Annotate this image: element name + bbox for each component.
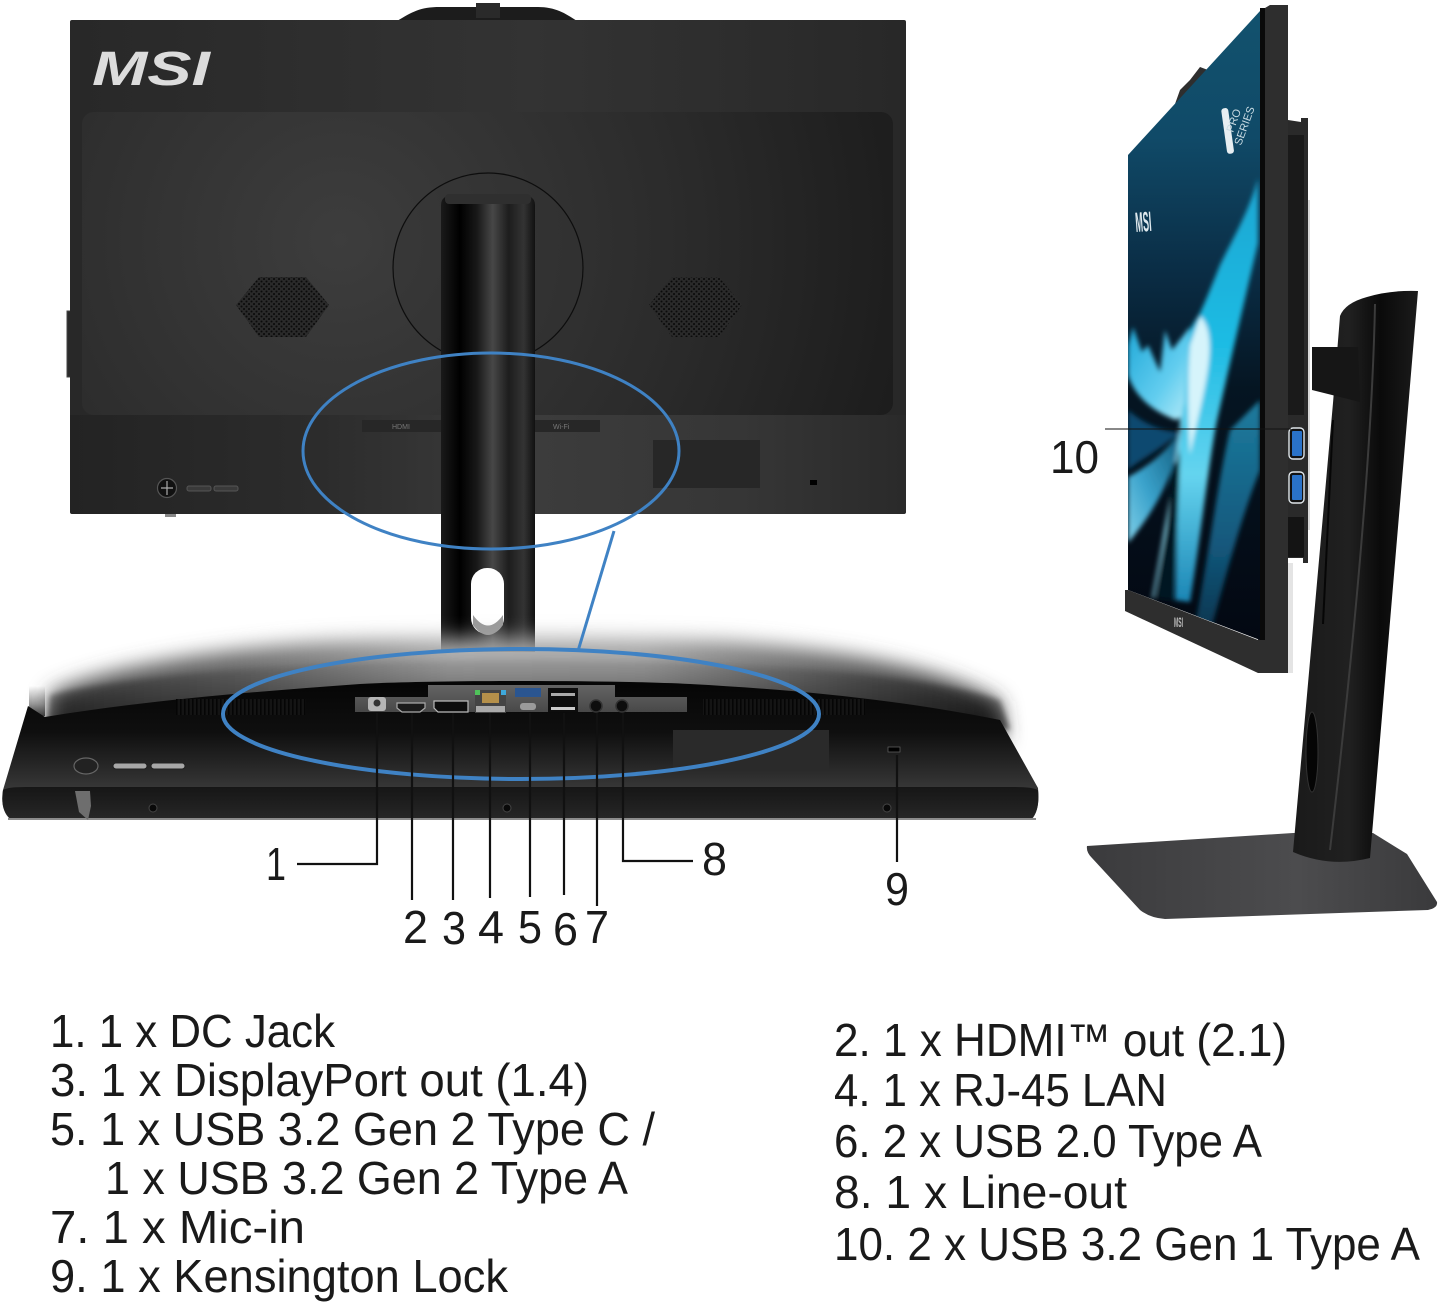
stand top cap (445, 194, 531, 204)
hinge arm (1312, 347, 1360, 402)
screen (1128, 11, 1260, 640)
port list left column: 3. 1 x DisplayPort out (1.4) (50, 1054, 589, 1106)
main band (1175, 178, 1258, 602)
bottom edge highlight (8, 818, 1036, 820)
dark swirl (1128, 410, 1180, 470)
thin strand (1153, 405, 1183, 598)
monitor side view: MSI (1174, 614, 1183, 630)
callout connector (578, 531, 614, 651)
port list left column: 9. 1 x Kensington Lock (50, 1250, 509, 1302)
callout ellipse lower (223, 649, 819, 779)
number labels: 9 (885, 863, 909, 915)
side button panel (67, 311, 82, 377)
rating plate (673, 730, 829, 771)
callout ellipse upper (303, 353, 679, 549)
stand cable slot (1306, 712, 1318, 792)
monitor back housing (70, 20, 906, 514)
number labels (266, 833, 909, 955)
cable hole (471, 568, 504, 635)
number label 10: 10 (1050, 431, 1099, 483)
webcam bump (397, 3, 577, 21)
port 1 DC jack (368, 697, 386, 711)
monitor side view (1050, 5, 1437, 919)
leader line 10 (1105, 428, 1291, 430)
number labels: 4 (478, 901, 504, 953)
MSI logo: MSI (92, 43, 212, 96)
lower housing band (70, 415, 906, 514)
port list left column: 1 x USB 3.2 Gen 2 Type A (105, 1152, 628, 1204)
base body (2, 681, 1038, 819)
stand slit (1323, 420, 1333, 624)
highlight petal (1188, 316, 1210, 455)
port label strip: HDMI (392, 424, 410, 431)
port list right column: 10. 2 x USB 3.2 Gen 1 Type A (834, 1218, 1420, 1270)
USB port upper (1289, 428, 1304, 459)
side inner black line (1260, 8, 1265, 640)
base plate (1087, 833, 1437, 919)
left petals (1128, 327, 1190, 420)
stand pole (441, 195, 535, 652)
port list right column: 6. 2 x USB 2.0 Type A (834, 1115, 1262, 1167)
port 2 HDMI (397, 703, 425, 712)
cable clip (75, 791, 91, 820)
top surface blurred (50, 638, 1005, 740)
side body (1258, 5, 1288, 673)
port label strip: Wi-Fi (553, 424, 570, 431)
port list right column: 4. 1 x RJ-45 LAN (834, 1064, 1167, 1116)
screen pro series mark (1221, 105, 1258, 154)
vents left (176, 699, 306, 715)
number labels: 6 (553, 903, 578, 955)
haze band (1195, 400, 1260, 640)
black gap (1158, 455, 1180, 600)
port 8 line-out (616, 700, 628, 712)
USB port lower (1289, 472, 1304, 503)
port 5 USB (515, 688, 541, 710)
speaker grille left (236, 277, 329, 337)
screen pro series mark: PRO (1225, 107, 1244, 134)
port list right column: 8. 1 x Line-out (834, 1166, 1127, 1218)
monitor bottom view (2, 638, 1038, 820)
port 7 mic (590, 700, 602, 712)
port list right column: 2. 1 x HDMI™ out (2.1) (834, 1014, 1287, 1066)
number labels: 3 (442, 902, 466, 954)
lock slot (810, 480, 817, 485)
stand column (1293, 291, 1418, 862)
port 6 USB stack (548, 688, 578, 712)
rear recess lower (1288, 517, 1304, 557)
lower white gap (1288, 563, 1293, 673)
port list left column (50, 1005, 655, 1302)
port label strip (362, 420, 600, 432)
port list right column (834, 1014, 1420, 1270)
rating label (653, 440, 760, 488)
rear box (1288, 118, 1308, 563)
kensington slot (888, 747, 900, 752)
leader lines (297, 713, 897, 906)
vents right (703, 699, 866, 715)
top surface shade (46, 660, 1010, 730)
speaker grille right (649, 277, 742, 337)
number labels: 7 (585, 901, 609, 953)
rear cover panel (82, 112, 893, 415)
rear recess upper (1288, 135, 1304, 415)
monitor rear view (67, 3, 906, 652)
front lip (2, 787, 1038, 818)
number labels: 1 (266, 838, 286, 890)
port panel (355, 685, 687, 712)
port 3 DisplayPort (434, 701, 468, 712)
bottom bezel (1125, 590, 1260, 673)
number labels: 5 (518, 901, 542, 953)
power and buttons bottom (74, 758, 185, 774)
port list left column: 7. 1 x Mic-in (50, 1201, 305, 1253)
port 4 LAN (475, 690, 506, 713)
monitor side view: MSI (1134, 206, 1152, 238)
lower sweep (1128, 425, 1183, 543)
screen artwork (1128, 178, 1260, 640)
screws (149, 804, 891, 812)
port list left column: 5. 1 x USB 3.2 Gen 2 Type C / (50, 1103, 655, 1155)
number labels: 8 (702, 833, 727, 885)
rear edge highlight (1308, 200, 1310, 530)
power button and buttons (158, 478, 238, 517)
number labels: 2 (403, 901, 428, 953)
webcam side (1175, 67, 1208, 104)
screen pro series mark: SERIES (1233, 105, 1258, 147)
stand edge highlight (1330, 304, 1375, 850)
port list left column: 1. 1 x DC Jack (50, 1005, 336, 1057)
left stub (29, 686, 45, 716)
mount circle (393, 173, 583, 363)
